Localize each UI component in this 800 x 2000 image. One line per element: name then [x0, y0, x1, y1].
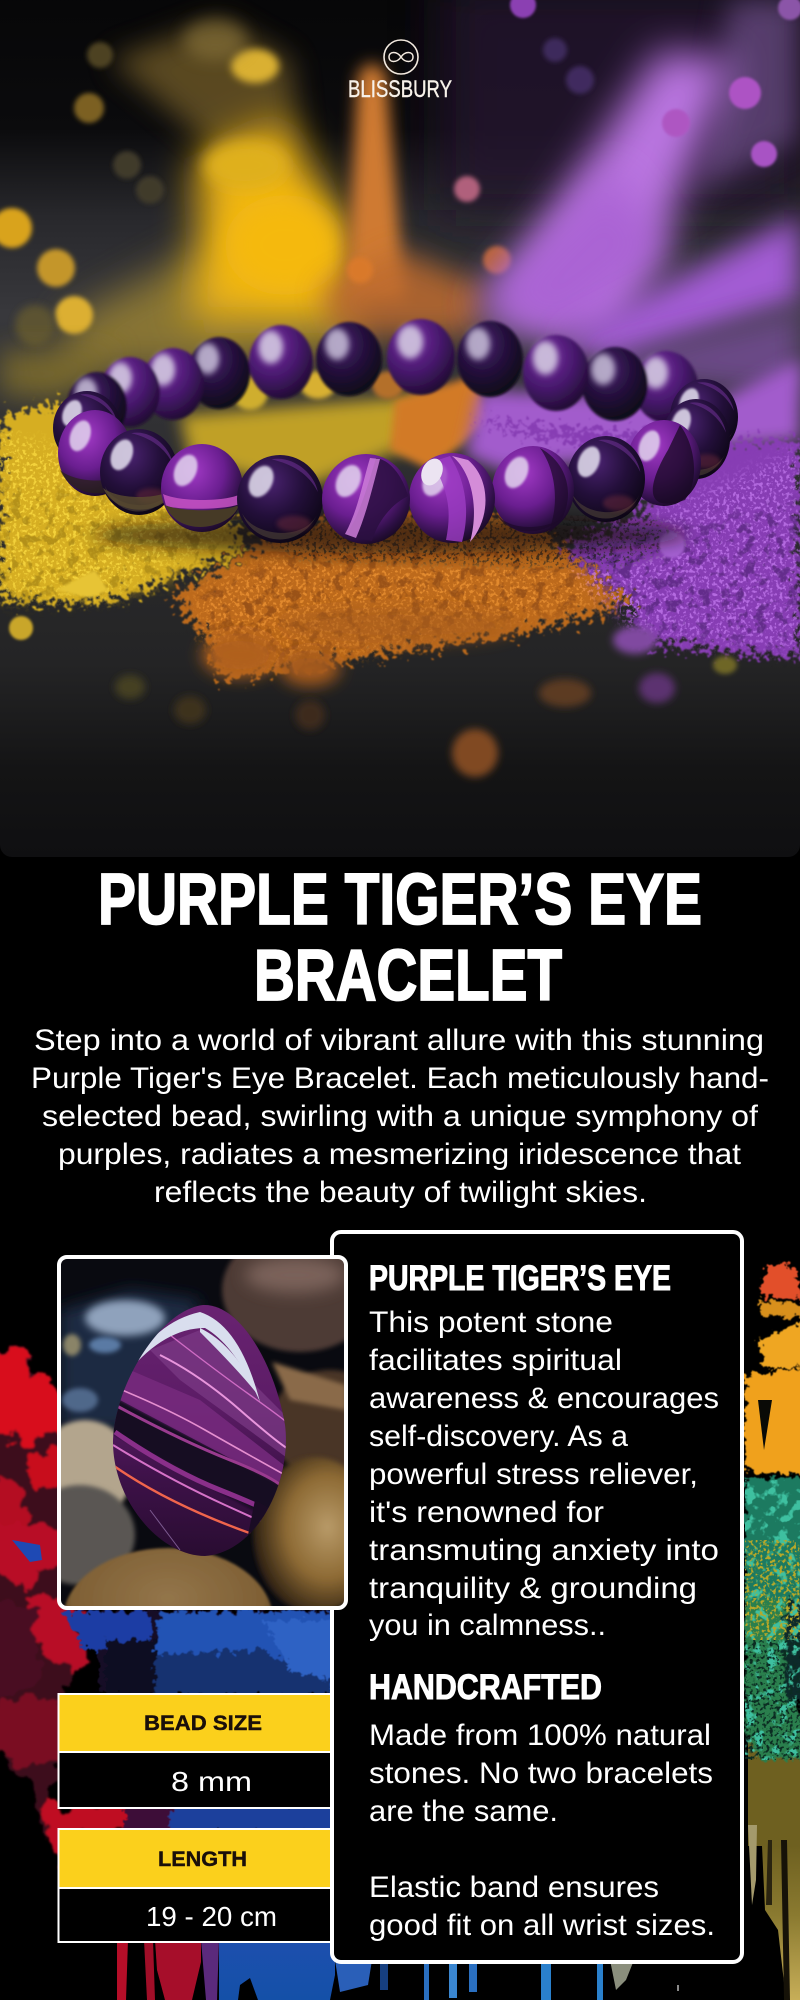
right-side beads, far to near	[670, 379, 738, 442]
polished purple stone	[110, 1300, 290, 1560]
text block: handcrafted details: stones. No two bracelets	[369, 1757, 713, 1790]
heading: purple tiger's eye: PURPLE TIGER’S EYE	[369, 1259, 671, 1298]
heading: handcrafted: HANDCRAFTED	[369, 1668, 602, 1707]
text block: handcrafted details: Elastic band ensures	[369, 1871, 659, 1904]
text block: stone benefits: awareness & encourages	[369, 1382, 719, 1415]
text block: handcrafted details: are the same.	[369, 1795, 558, 1828]
hero photo: bracelet with colour powder	[0, 0, 800, 857]
banded bead	[409, 453, 495, 543]
orange powder column	[320, 64, 511, 335]
intro paragraph: selected bead, swirling with a unique symphony of	[42, 1100, 759, 1133]
text block: stone benefits: This potent stone	[369, 1306, 613, 1339]
spec table	[58, 1694, 338, 1942]
bead size value	[58, 1752, 338, 1808]
bead size label	[58, 1694, 338, 1752]
title: BRACELET	[254, 936, 562, 1016]
paint splash backdrop: rainbow, right	[745, 1262, 800, 2000]
title	[98, 860, 702, 1016]
stone photo	[57, 1255, 348, 1610]
text block: stone benefits: you in calmness..	[369, 1609, 606, 1642]
text block: stone benefits: tranquility & grounding	[369, 1572, 697, 1605]
text block: stone benefits: self-discovery. As a	[369, 1420, 628, 1453]
length value	[58, 1888, 338, 1942]
length label: LENGTH	[158, 1848, 247, 1871]
text block: handcrafted details: good fit on all wrist sizes.	[369, 1909, 715, 1942]
intro paragraph	[31, 1024, 769, 1209]
logo: infinity ring and Blissbury wordmark	[348, 40, 452, 103]
blue speckled background	[60, 1290, 200, 1430]
text block: handcrafted details	[369, 1719, 715, 1942]
logo: infinity ring and Blissbury wordmark: BLISSBURY	[348, 76, 452, 103]
text block: stone benefits: facilitates spiritual	[369, 1344, 622, 1377]
length label	[58, 1829, 338, 1888]
text block: stone benefits: powerful stress reliever,	[369, 1458, 698, 1491]
text block: handcrafted details: Made from 100% natural	[369, 1719, 711, 1752]
yellow powder cloud	[0, 20, 360, 370]
length value: 19 - 20 cm	[146, 1901, 277, 1932]
powder grain texture	[0, 430, 800, 670]
paint drips: bottom	[117, 1940, 679, 2000]
intro paragraph: Purple Tiger's Eye Bracelet. Each meticulously hand-	[31, 1062, 769, 1095]
left-side beads, far to near	[53, 391, 116, 448]
bead size value: 8 mm	[171, 1766, 252, 1797]
text block: stone benefits	[369, 1306, 719, 1642]
bracelet	[53, 319, 738, 553]
scattered powder foreground	[115, 607, 737, 777]
text block: stone benefits: transmuting anxiety into	[369, 1534, 719, 1567]
panel: stone details	[332, 1232, 742, 1962]
powder ground: yellow, orange, purple	[0, 350, 800, 680]
purple powder plumes	[480, 0, 800, 395]
rocks	[61, 1259, 344, 1606]
paint splash backdrop: red and blue, left	[0, 1345, 335, 1870]
back beads	[67, 319, 698, 440]
yellow reflections between back beads	[232, 371, 404, 410]
text block: stone benefits: it's renowned for	[369, 1496, 604, 1529]
bead size label: BEAD SIZE	[144, 1712, 262, 1735]
swirled centre bead	[322, 454, 410, 544]
intro paragraph: Step into a world of vibrant allure with this stunning	[34, 1024, 764, 1057]
intro paragraph: reflects the beauty of twilight skies.	[154, 1176, 647, 1209]
intro paragraph: purples, radiates a mesmerizing iridescence that	[58, 1138, 742, 1171]
